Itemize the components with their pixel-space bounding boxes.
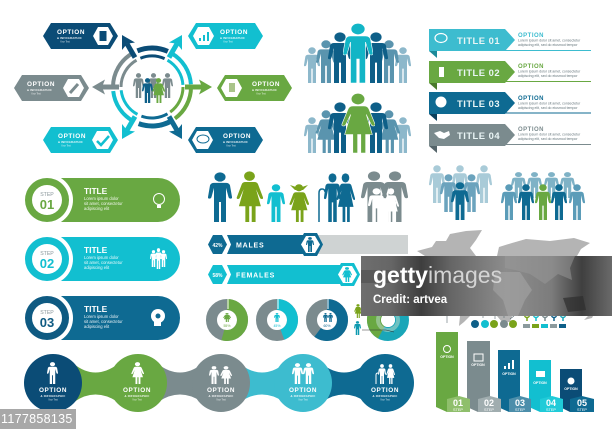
chain circle: children: OPTION: [207, 387, 235, 394]
chain circle: family: Your Text: [298, 398, 308, 402]
chain connectors: [74, 364, 366, 402]
bar 02: 02: [484, 398, 494, 408]
male percentage bar: [208, 233, 408, 256]
image id tag: 1177858135: [1, 412, 73, 426]
step 03: adipiscing elit: [84, 324, 110, 329]
bar 04: 04: [546, 398, 556, 408]
chain circle: man: Your Text: [48, 398, 58, 402]
banner: title 01: Lorem ipsum dolor sit amet, consectetur: [518, 38, 581, 42]
bar 05: 05: [577, 398, 587, 408]
bar 01: STEP: [453, 408, 463, 412]
map pins and legend: [523, 312, 566, 328]
donut chart: multi ring with figures: [354, 301, 407, 339]
step 02: STEP: [40, 251, 54, 257]
banner: title 02: TITLE 02: [457, 67, 500, 78]
option hexagon: bottom left: Your Text: [61, 144, 71, 148]
option hexagon: left: & INFOGRAPHIC: [27, 88, 52, 92]
crowd: woman focus: [304, 93, 411, 153]
watermark band: gettyimages: [373, 262, 502, 288]
step 02: [21, 233, 180, 285]
banner: title 04: TITLE 04: [457, 130, 500, 141]
bar 05: [560, 369, 594, 412]
option hexagon: top left: Your Text: [60, 40, 70, 44]
option hexagon: right: & INFOGRAPHIC: [252, 88, 277, 92]
female percentage bar: 58%: [212, 273, 223, 279]
image id tag: [0, 409, 76, 429]
step 01: 01: [40, 197, 54, 212]
family figures row: [208, 171, 408, 222]
chain circle: elderly: & INFOGRAPHIC: [373, 394, 397, 398]
step 01: sit amet, consectetur: [84, 201, 123, 206]
option hexagon: top right: OPTION: [220, 29, 248, 36]
step pills: [21, 174, 180, 344]
banner: title 01: [429, 29, 591, 58]
bar 04: [529, 360, 563, 412]
option hexagon: bottom right: Your Text: [226, 144, 236, 148]
watermark band: [361, 256, 612, 316]
option hexagon: left: OPTION: [27, 81, 55, 88]
arrows: [92, 31, 212, 143]
option hexagon: top left: & INFOGRAPHIC: [57, 36, 82, 40]
donut chart: couple: [311, 299, 343, 336]
option hexagon: bottom right: [188, 127, 263, 153]
option hexagon: top right: Your Text: [223, 40, 233, 44]
bar 05: OPTION: [564, 387, 578, 391]
title banners: [429, 29, 591, 153]
step 03: 03: [40, 315, 54, 330]
watermark band: Credit: artvea: [373, 294, 448, 306]
step 02: adipiscing elit: [84, 265, 110, 270]
map location dots: [471, 320, 517, 328]
banner: title 04: [429, 124, 591, 153]
chain circle: children: & INFOGRAPHIC: [209, 394, 233, 398]
option hexagon: top left: OPTION: [57, 29, 85, 36]
banner: title 02: Lorem ipsum dolor sit amet, consectetur: [518, 70, 581, 74]
center people icon: [133, 73, 173, 103]
banner: title 03: OPTION: [518, 96, 544, 102]
banner: title 03: adipiscing elit, sed do eiusmod tempor: [518, 106, 578, 110]
step 03: STEP: [40, 310, 54, 316]
chain circle: family: OPTION: [289, 387, 317, 394]
step 02: Lorem ipsum dolor: [84, 255, 119, 260]
chain of option circles: [24, 354, 414, 412]
banner: title 04: OPTION: [518, 127, 544, 133]
chain circle: woman: & INFOGRAPHIC: [125, 394, 149, 398]
chain circle: elderly: Your Text: [380, 398, 390, 402]
bar 03: OPTION: [502, 372, 516, 376]
step 02: sit amet, consectetur: [84, 260, 123, 265]
bar 03: 03: [515, 398, 525, 408]
bar 03: STEP: [515, 408, 525, 412]
bar 02: STEP: [484, 408, 494, 412]
banner: title 04: adipiscing elit, sed do eiusmod tempor: [518, 137, 578, 141]
option hexagon: bottom left: & INFOGRAPHIC: [58, 140, 83, 144]
chain circle: man: & INFOGRAPHIC: [41, 394, 65, 398]
small crowd: two rows: [501, 172, 585, 220]
step 01: TITLE: [84, 186, 108, 196]
banner: title 01: OPTION: [518, 33, 544, 39]
option hexagon: right: OPTION: [252, 81, 280, 88]
male percentage bar: 42%: [212, 243, 223, 249]
donut chart: couple: 60%: [323, 324, 331, 328]
female percentage bar: FEMALES: [236, 272, 275, 280]
female percentage bar: [208, 263, 360, 286]
chain circle: man: OPTION: [39, 387, 67, 394]
bar 02: OPTION: [471, 363, 485, 367]
banner: title 02: OPTION: [518, 64, 544, 70]
banner: title 01: adipiscing elit, sed do eiusmod tempor: [518, 43, 578, 47]
ring segments: [99, 34, 205, 140]
step 03: Lorem ipsum dolor: [84, 314, 119, 319]
chain circle: elderly: [356, 354, 414, 412]
world map: [417, 230, 595, 326]
option hexagon: left: [14, 75, 89, 101]
bar 03: [498, 350, 531, 412]
donut chart: male: 45%: [273, 324, 281, 328]
banner: title 03: [429, 92, 591, 121]
chain circle: family: & INFOGRAPHIC: [291, 394, 315, 398]
step 01: STEP: [40, 192, 54, 198]
chain circle: family: [274, 354, 332, 412]
option hexagon: right: [217, 75, 292, 101]
bar 04: STEP: [546, 408, 556, 412]
option hexagon: right: Your Text: [256, 92, 266, 96]
donut chart: female: [211, 299, 243, 336]
chain circle: elderly: OPTION: [371, 387, 399, 394]
option hexagon: bottom left: OPTION: [58, 133, 86, 140]
option hexagon: top right: [188, 23, 263, 49]
step 01: [21, 174, 180, 226]
banner: title 04: Lorem ipsum dolor sit amet, consectetur: [518, 132, 581, 136]
step bar chart: [436, 332, 594, 412]
donut chart: male: [261, 299, 293, 336]
step 03: sit amet, consectetur: [84, 319, 123, 324]
step 02: TITLE: [84, 245, 108, 255]
option hexagon: left: Your Text: [31, 92, 41, 96]
bar 01: OPTION: [440, 355, 454, 359]
step 02: 02: [40, 256, 54, 271]
small crowd: layered: [429, 165, 492, 220]
step 01: Lorem ipsum dolor: [84, 196, 119, 201]
chain circle: woman: OPTION: [123, 387, 151, 394]
banner: title 02: adipiscing elit, sed do eiusmod tempor: [518, 74, 578, 78]
option hexagon: top right: & INFOGRAPHIC: [220, 36, 245, 40]
panel: radial option diagram: [14, 23, 292, 153]
option hexagon: bottom left: [43, 127, 118, 153]
bar 01: [436, 332, 470, 412]
bar 01: 01: [453, 398, 463, 408]
step 01: adipiscing elit: [84, 206, 110, 211]
male percentage bar: MALES: [236, 242, 264, 250]
option hexagon: bottom right: OPTION: [223, 133, 251, 140]
option hexagon: top left: [43, 23, 118, 49]
option hexagon: bottom right: & INFOGRAPHIC: [223, 140, 248, 144]
crowd: man focus: [304, 23, 411, 83]
banner: title 02: [429, 61, 591, 90]
banner: title 03: Lorem ipsum dolor sit amet, consectetur: [518, 102, 581, 106]
chain circle: children: [192, 354, 250, 412]
banner: title 03: TITLE 03: [457, 98, 500, 109]
bar 04: OPTION: [533, 381, 547, 385]
chain circle: woman: [109, 354, 167, 412]
chain circle: man: [24, 354, 82, 412]
step 03: [21, 292, 180, 344]
donut chart: female: 55%: [223, 324, 231, 328]
bar 02: [467, 341, 501, 412]
chain circle: woman: Your Text: [132, 398, 142, 402]
bar 05: STEP: [577, 408, 587, 412]
chain circle: children: Your Text: [216, 398, 226, 402]
step 03: TITLE: [84, 304, 108, 314]
banner: title 01: TITLE 01: [457, 35, 500, 46]
